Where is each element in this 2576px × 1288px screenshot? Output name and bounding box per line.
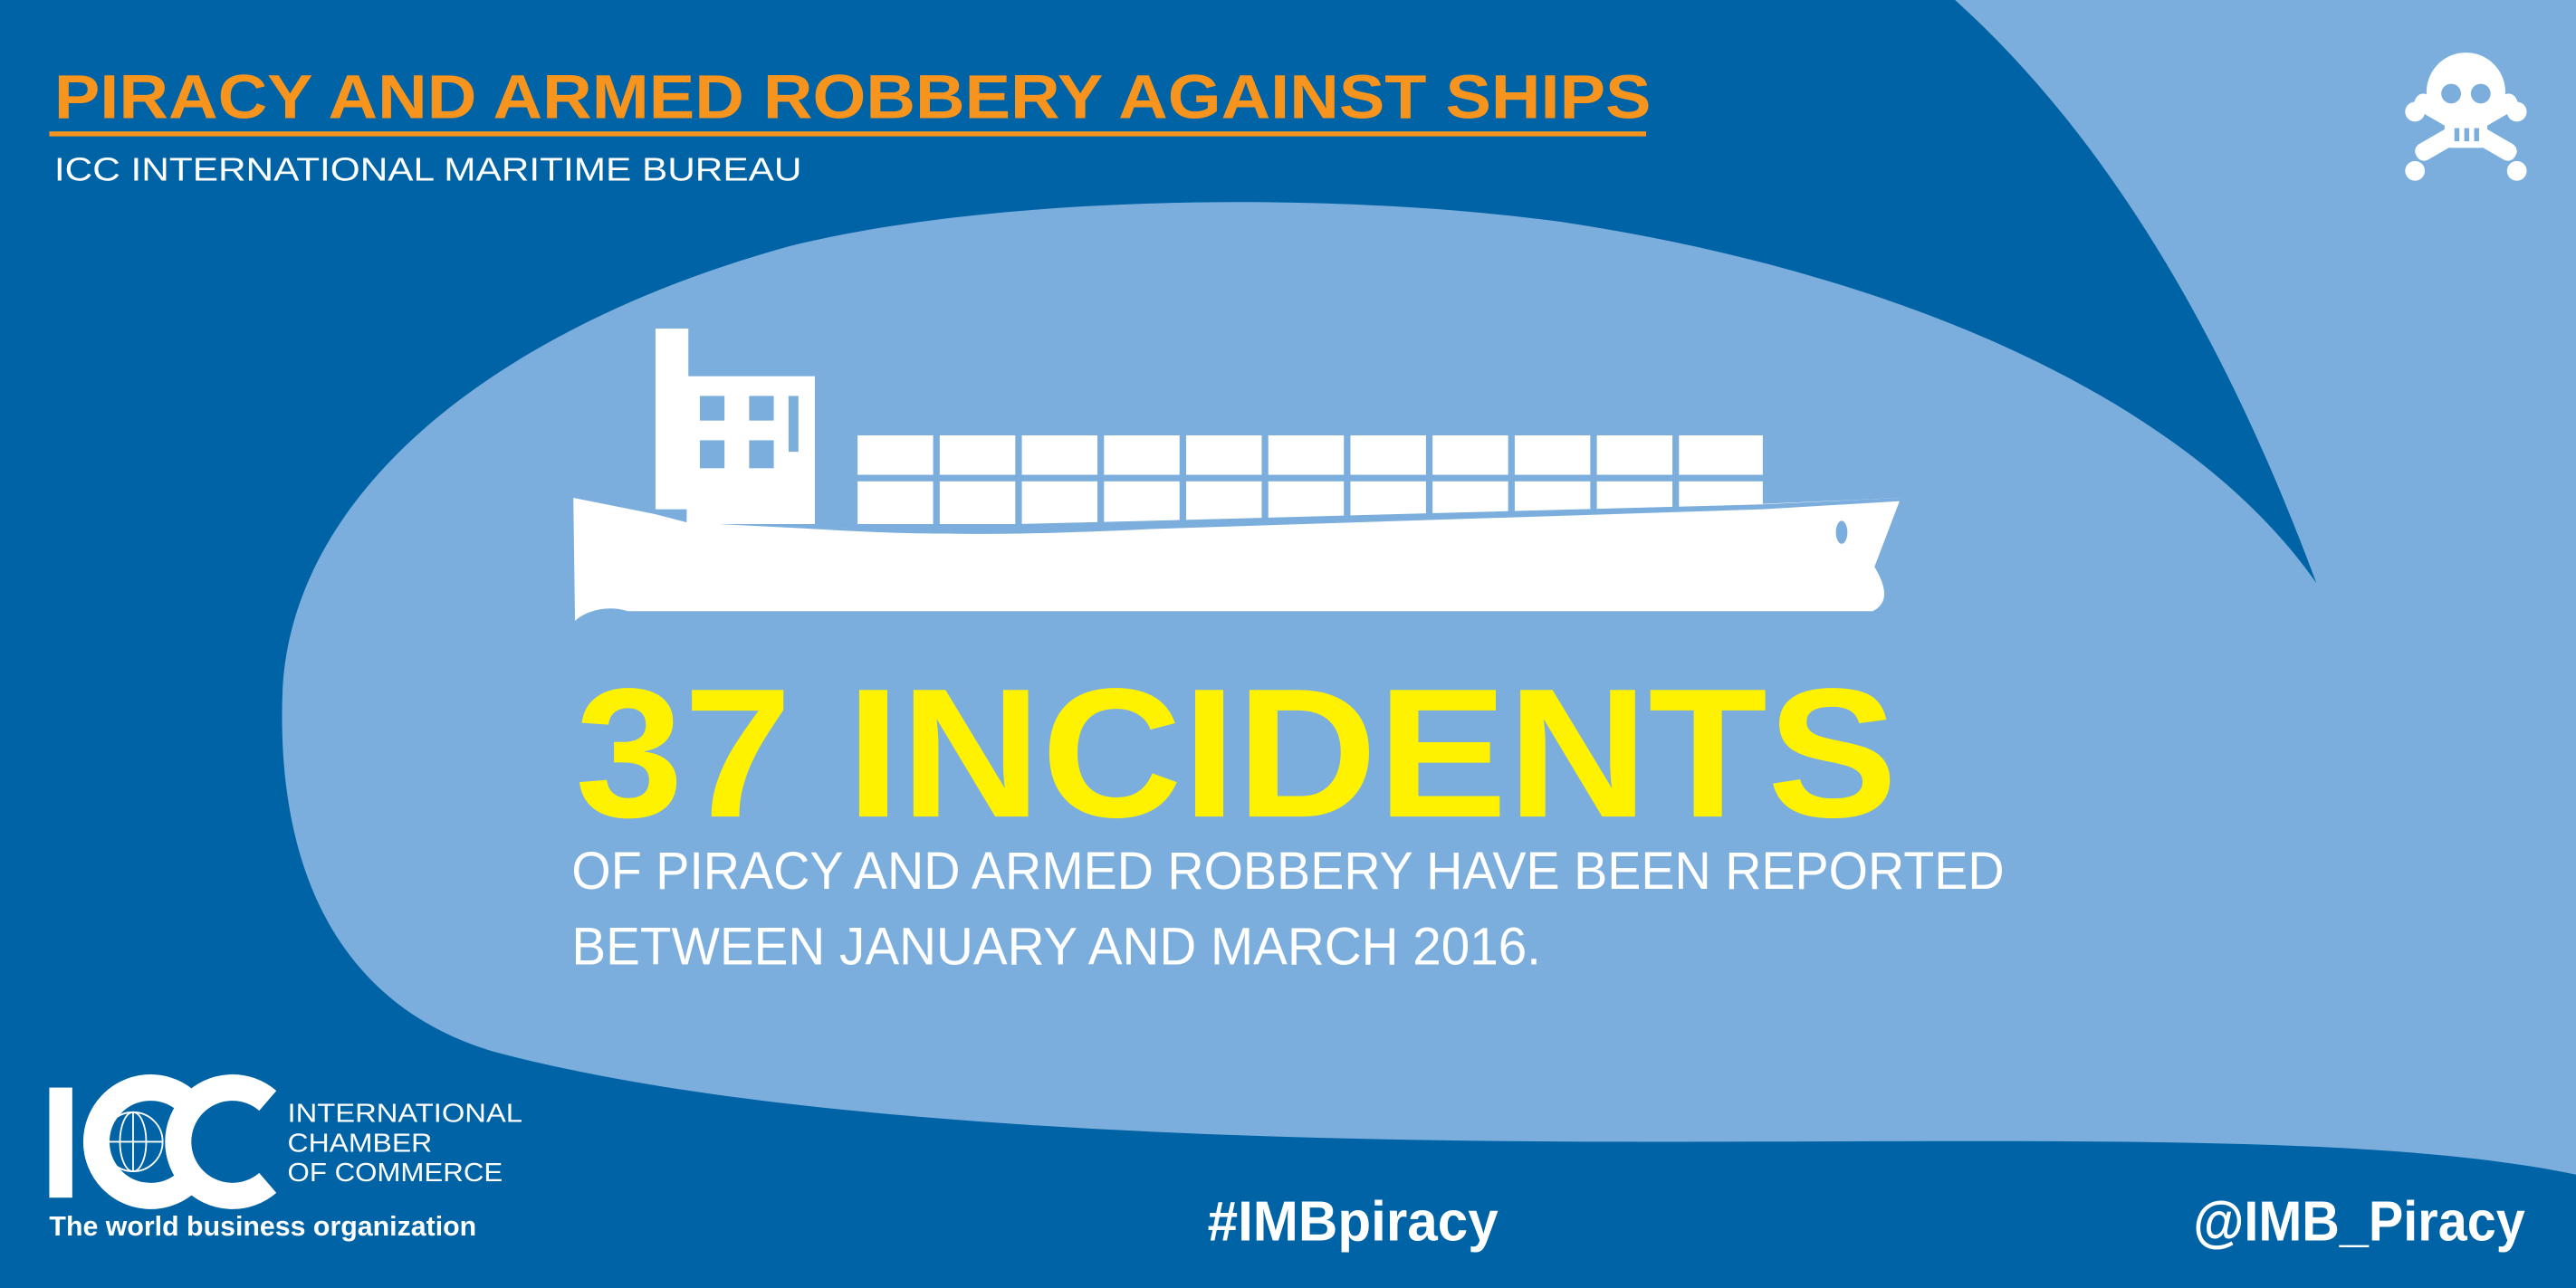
logo: ICC: CHAMBER — [288, 1129, 432, 1158]
hashtag: #IMBpiracy — [1208, 1190, 1499, 1253]
logo: ICC — [49, 1088, 522, 1242]
headline number: 37 INCIDENTS — [575, 651, 1898, 856]
description text: BETWEEN JANUARY AND MARCH 2016. — [571, 917, 1541, 976]
twitter handle: @IMB_Piracy — [2193, 1190, 2525, 1253]
description text — [571, 842, 2005, 976]
description text: OF PIRACY AND ARMED ROBBERY HAVE BEEN REPORTED — [571, 842, 2005, 901]
logo: ICC: INTERNATIONAL — [288, 1100, 522, 1129]
title: PIRACY AND ARMED ROBBERY AGAINST SHIPS — [54, 62, 1651, 132]
icon: container ship — [573, 329, 1901, 621]
logo: ICC: OF COMMERCE — [288, 1159, 503, 1188]
icon: skull and crossbones — [2405, 52, 2527, 181]
subtitle: ICC INTERNATIONAL MARITIME BUREAU — [54, 151, 801, 188]
logo: ICC: The world business organization — [49, 1210, 476, 1242]
